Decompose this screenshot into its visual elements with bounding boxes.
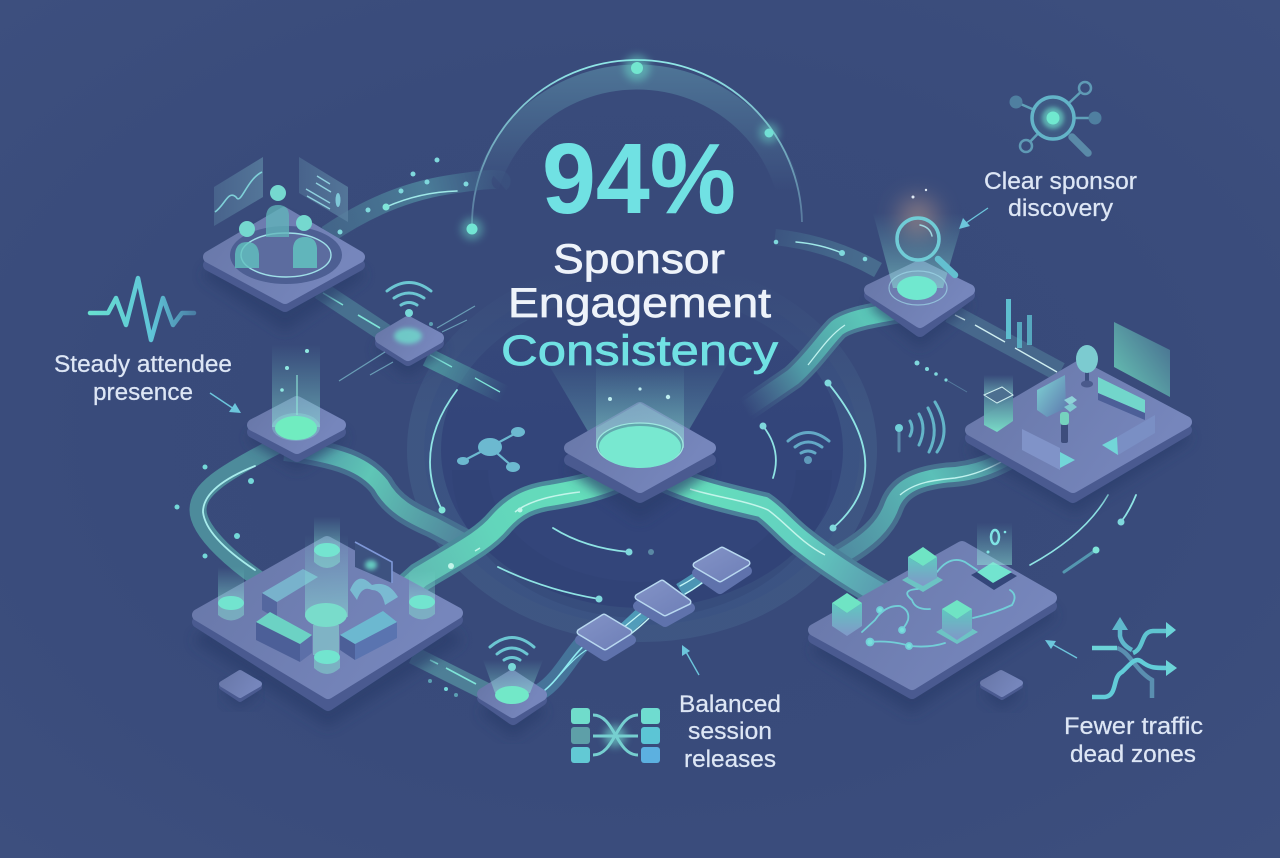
hologram	[977, 523, 1012, 565]
platform: lounge hub	[198, 517, 457, 722]
platform: central hub	[570, 360, 710, 515]
icon: traffic paths	[1092, 617, 1177, 698]
icon: bars	[1006, 299, 1032, 348]
callout: fewer traffic dead zones	[1045, 617, 1203, 768]
top arc around headline	[461, 55, 802, 240]
small tile left	[222, 673, 259, 705]
platform: exhibit lounge	[971, 322, 1186, 508]
callout: steady attendee presence: presence	[93, 379, 193, 406]
label text: Balanced	[679, 691, 781, 718]
cube	[984, 375, 1013, 432]
arrow	[1045, 640, 1077, 658]
glowing connection	[540, 568, 712, 692]
hub beam	[543, 355, 733, 440]
icon: balanced grid	[571, 708, 660, 763]
orbit arcs around hub	[430, 380, 1136, 602]
platform: wifi node	[339, 282, 475, 381]
callout: clear sponsor discovery	[959, 82, 1137, 229]
link: ribbon to magnifier platform	[774, 237, 878, 270]
icon: signal	[895, 402, 944, 452]
platform: traffic map	[814, 523, 1051, 708]
icon: wifi	[387, 282, 431, 317]
headline: Sponsor: Sponsor	[553, 235, 725, 282]
trail dots	[914, 360, 967, 392]
link: arc ribbon to top-left platform	[327, 158, 501, 235]
floating particles	[174, 322, 458, 697]
east ribbon	[840, 443, 1030, 557]
headline: Consistency: Consistency	[501, 327, 779, 375]
north-east wave ribbon	[745, 308, 915, 410]
wavy ribbon from steady node	[285, 448, 478, 549]
callout: balanced session releases: session	[688, 718, 772, 745]
label text: Steady attendee	[54, 351, 232, 378]
kiosk	[350, 542, 398, 605]
left loop ribbon	[198, 445, 278, 592]
warm glow	[899, 198, 937, 236]
platform: community circle	[209, 157, 359, 326]
panel: text list	[299, 157, 348, 222]
cubes	[832, 547, 1017, 644]
label text: Clear sponsor	[984, 168, 1137, 195]
beam	[272, 345, 320, 427]
label text: Fewer traffic	[1064, 713, 1203, 740]
arrow	[210, 393, 241, 413]
icon: hub network	[457, 427, 525, 472]
arrow	[682, 645, 699, 675]
straight links	[320, 290, 1060, 692]
arrow	[959, 208, 988, 229]
route lines	[862, 560, 1015, 649]
icon: network magnifier	[1010, 82, 1102, 153]
benches	[256, 569, 397, 662]
callout: clear sponsor discovery: discovery	[1008, 195, 1113, 222]
pillars	[218, 517, 435, 674]
figure	[1060, 396, 1077, 443]
icon: center wifi	[788, 432, 829, 464]
central ring bands	[424, 275, 860, 625]
platform: magnifier discovery	[870, 189, 969, 342]
headline: 94%: 94%	[542, 123, 736, 235]
hub ribbon to south-west	[400, 475, 622, 595]
sofas	[1022, 375, 1155, 470]
hub ribbon to south-east	[660, 475, 895, 602]
small tile right	[983, 673, 1020, 706]
icon: magnifier	[897, 218, 955, 275]
headline: Engagement: Engagement	[508, 279, 771, 326]
callout: steady attendee presence	[54, 278, 241, 413]
callout: fewer traffic dead zones: dead zones	[1070, 741, 1196, 768]
icon: people	[235, 185, 317, 268]
platform: steady presence node	[253, 345, 340, 465]
panel: wall screen	[1114, 322, 1170, 397]
platform: wifi release node	[483, 638, 543, 732]
icon: tree	[1076, 345, 1098, 388]
icon: wifi	[490, 638, 534, 671]
callout: balanced session releases: releases	[684, 746, 776, 773]
callout: balanced session releases	[571, 645, 781, 773]
panel: line chart	[214, 157, 263, 226]
icon: pulse	[90, 278, 194, 340]
chain tiles	[580, 550, 747, 656]
